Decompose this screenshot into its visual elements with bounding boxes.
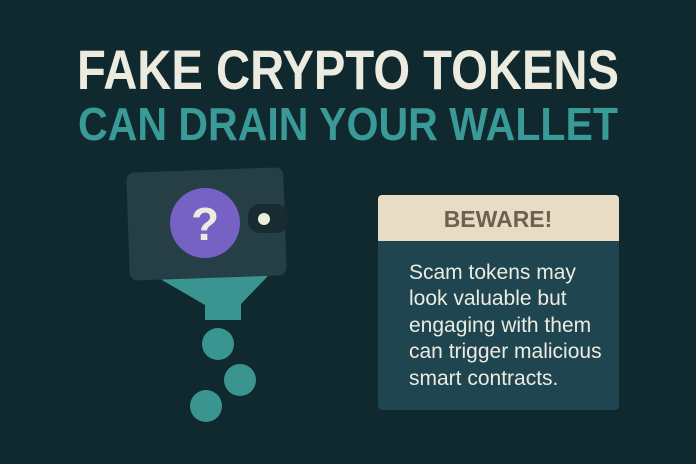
title xyxy=(77,38,619,150)
funnel xyxy=(155,276,268,320)
callout: beware xyxy=(378,195,619,410)
callout header xyxy=(378,195,619,241)
callout text: smart contracts. xyxy=(409,367,558,390)
coins xyxy=(190,328,256,422)
question badge xyxy=(170,188,240,258)
clasp xyxy=(248,204,288,233)
callout text: can trigger malicious xyxy=(409,340,602,363)
wallet body xyxy=(126,167,287,281)
callout text: look valuable but xyxy=(409,287,567,310)
callout text: Scam tokens may xyxy=(409,261,576,284)
callout text xyxy=(409,261,602,390)
question badge: ? xyxy=(191,198,219,250)
icon: wallet draining coins xyxy=(126,167,288,422)
callout header: BEWARE! xyxy=(444,206,552,232)
callout text: engaging with them xyxy=(409,314,591,337)
title: CAN DRAIN YOUR WALLET xyxy=(78,98,618,150)
